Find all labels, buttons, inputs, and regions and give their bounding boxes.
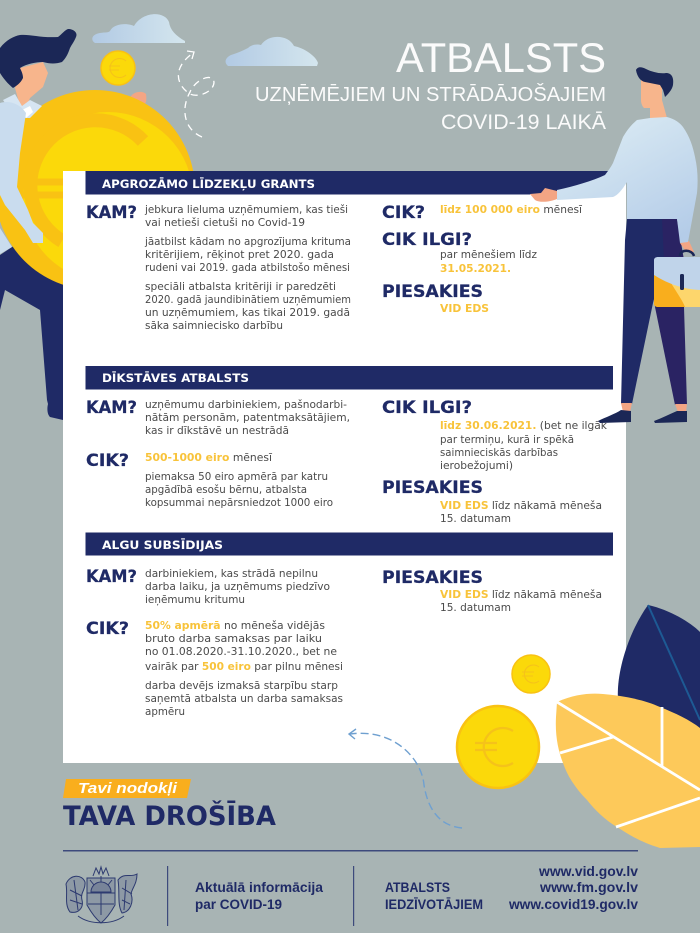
text: support for residents: ATBALSTS (385, 880, 450, 895)
text: support for residents (385, 880, 483, 912)
text block: wage subsidies left column (86, 567, 343, 718)
icon: dashed loop arrow (178, 51, 214, 137)
large coin (0, 90, 195, 290)
text block: grants right column: VID EDS (440, 303, 489, 315)
text: website links: www.covid19.gov.lv (508, 897, 638, 912)
wrist (680, 241, 694, 252)
text block: wage subsidies left column: darba laiku, ja uzņēmums piedzīvo (145, 581, 330, 593)
section header: dikstaves atbalsts: DĪKSTĀVES ATBALSTS (102, 371, 249, 385)
text block: wage subsidies left column: 50% apmērā no mēneša vidējās (145, 620, 325, 632)
text: current information (195, 880, 323, 912)
text block: wage subsidies left column: no 01.08.2020.-31.10.2020., bet ne (145, 646, 337, 658)
neck and face (641, 80, 667, 118)
text block: grants right column: līdz 100 000 eiro mēnesī (440, 204, 582, 216)
text block: idle support left column: KAM? (86, 398, 137, 418)
shirt body (0, 228, 12, 254)
text block: wage subsidies left column: darba devējs izmaksā starpību starp (145, 680, 338, 692)
icon: euro coin medium (512, 655, 550, 693)
text block: idle support left column: kas ir dīkstāvē un nestrādā (145, 425, 289, 437)
neck and face (15, 62, 48, 108)
hand (530, 188, 557, 202)
text: current information: Aktuālā informācija (195, 880, 323, 895)
text block: idle support left column: 500-1000 eiro mēnesī (145, 452, 272, 464)
shirt collar (3, 94, 42, 118)
text block: idle support right column (382, 398, 607, 525)
vertical divider right (353, 866, 354, 926)
text block: wage subsidies right column: PIESAKIES (382, 568, 483, 588)
text block: wage subsidies left column: vairāk par 500 eiro par pilnu mēnesi (145, 661, 343, 673)
icon: euro coin large (457, 706, 539, 788)
shoes (598, 410, 687, 423)
icon: cloud left (92, 14, 185, 43)
trousers (0, 245, 63, 420)
leaf: navy (618, 605, 700, 730)
section header: apgrozamo lidzeklu grants: APGROZĀMO LĪDZEKĻU GRANTS (102, 177, 315, 191)
section header: algu subsidijas (86, 532, 613, 556)
text: website links (508, 864, 638, 912)
text: website links: www.vid.gov.lv (538, 864, 638, 879)
footer divider (63, 850, 638, 852)
briefcase (654, 251, 700, 307)
text block: idle support left column: apgādībā esošu bērnu, atbalsta (145, 484, 307, 496)
text block: wage subsidies right column: 15. datumam (440, 602, 511, 614)
text block: grants left column: kritērijiem, rēķinot pret 2020. gada (145, 249, 334, 261)
hair (0, 29, 77, 88)
front trousers (621, 219, 664, 404)
shirt with arm (557, 117, 698, 243)
title (255, 34, 606, 134)
text block: idle support right column: saimnieciskās darbības (440, 447, 558, 459)
heading: tava drosiba: TAVA DROŠĪBA (63, 800, 276, 832)
text block: wage subsidies right column (382, 568, 602, 614)
tag: tavi nodokli: Tavi nodokļi (78, 780, 178, 797)
skin hand behind coin (130, 92, 146, 106)
back leg (650, 219, 687, 405)
section header: algu subsidijas: ALGU SUBSĪDIJAS (102, 538, 223, 552)
text block: idle support left column: nātām personām, patentmaksātājiem, (145, 412, 350, 424)
text block: idle support left column: uzņēmumu darbiniekiem, pašnodarbi- (145, 399, 347, 411)
icon: cloud right (226, 37, 318, 66)
illustration: person pushing coin (0, 29, 195, 420)
text block: wage subsidies left column: darbiniekiem, kas strādā nepilnu (145, 568, 318, 580)
text block: idle support right column: par termiņu, kurā ir spēkā (440, 434, 574, 446)
text block: idle support right column: PIESAKIES (382, 478, 483, 498)
hair (636, 67, 673, 97)
text block: wage subsidies left column: saņemtā atbalsta un darba samaksas (145, 693, 343, 705)
text block: idle support right column: 15. datumam (440, 513, 511, 525)
icon: latvian coat of arms (66, 867, 137, 923)
text block: idle support left column: kopsummai nepārsniedzot 1000 eiro (145, 497, 333, 509)
text block: grants right column: CIK ILGI? (382, 230, 472, 250)
text block: grants left column (86, 203, 351, 332)
text block: wage subsidies left column: CIK? (86, 619, 129, 639)
text block: wage subsidies left column: bruto darba samaksas par laiku (145, 633, 322, 645)
vertical divider left (167, 866, 168, 926)
text block: grants right column: 31.05.2021. (440, 263, 511, 275)
collar white (22, 106, 33, 118)
title: COVID-19 LAIKĀ (441, 111, 606, 134)
text block: idle support left column (86, 398, 350, 509)
section header: dikstaves atbalsts (86, 366, 613, 390)
text block: idle support left column: CIK? (86, 451, 129, 471)
text block: grants left column: 2020. gadā jaundibinātiem uzņēmumiem (145, 294, 351, 306)
icon: small coin top (101, 51, 135, 85)
text block: grants left column: un uzņēmumiem, kas tikai 2019. gadā (145, 307, 350, 319)
illustration: person with briefcase (530, 67, 700, 423)
text block: wage subsidies left column: KAM? (86, 567, 137, 587)
text block: grants right column: PIESAKIES (382, 282, 483, 302)
text block: grants right column: CIK? (382, 203, 425, 223)
text block: grants left column: jebkura lieluma uzņēmumiem, kas tieši (144, 204, 348, 216)
text: website links: www.fm.gov.lv (539, 880, 638, 895)
text block: grants left column: KAM? (86, 203, 137, 223)
text block: grants right column: par mēnešiem līdz (440, 249, 537, 261)
text block: grants left column: jāatbilst kādam no apgrozījuma krituma (144, 236, 351, 248)
panel: white content area (63, 171, 626, 763)
text block: idle support right column: līdz 30.06.2021. (bet ne ilgāk (440, 420, 607, 432)
text block: grants left column: vai netieši cietuši no Covid-19 (145, 217, 305, 229)
text block: grants left column: sāka saimniecisko darbību (145, 320, 283, 332)
text block: wage subsidies right column: VID EDS līdz nākamā mēneša (440, 589, 602, 601)
tag: tavi nodokli (63, 779, 191, 798)
text: current information: par COVID-19 (195, 897, 282, 912)
text block: idle support left column: piemaksa 50 eiro apmērā par katru (145, 471, 328, 483)
text block: grants right column (382, 203, 582, 315)
ankles (621, 403, 687, 412)
text block: grants left column: rudeni vai 2019. gada atbilstošo mēnesi (145, 262, 350, 274)
title: ATBALSTS (396, 34, 606, 81)
icon: dashed blue arrow (349, 729, 462, 828)
text block: idle support right column: VID EDS līdz nākamā mēneša (440, 500, 602, 512)
section header: apgrozamo lidzeklu grants (86, 171, 613, 194)
shirt sleeve (0, 102, 43, 243)
text block: idle support right column: CIK ILGI? (382, 398, 472, 418)
leaf: yellow (556, 694, 700, 848)
text: support for residents: IEDZĪVOTĀJIEM (385, 896, 483, 912)
text block: idle support right column: ierobežojumi) (440, 460, 513, 472)
text block: wage subsidies left column: apmēru (145, 706, 185, 718)
title: UZŅĒMĒJIEM UN STRĀDĀJOŠAJIEM (255, 83, 606, 106)
text block: wage subsidies left column: ieņēmumu kritumu (145, 594, 245, 606)
text block: grants left column: speciāli atbalsta kritēriji ir paredzēti (145, 281, 336, 293)
